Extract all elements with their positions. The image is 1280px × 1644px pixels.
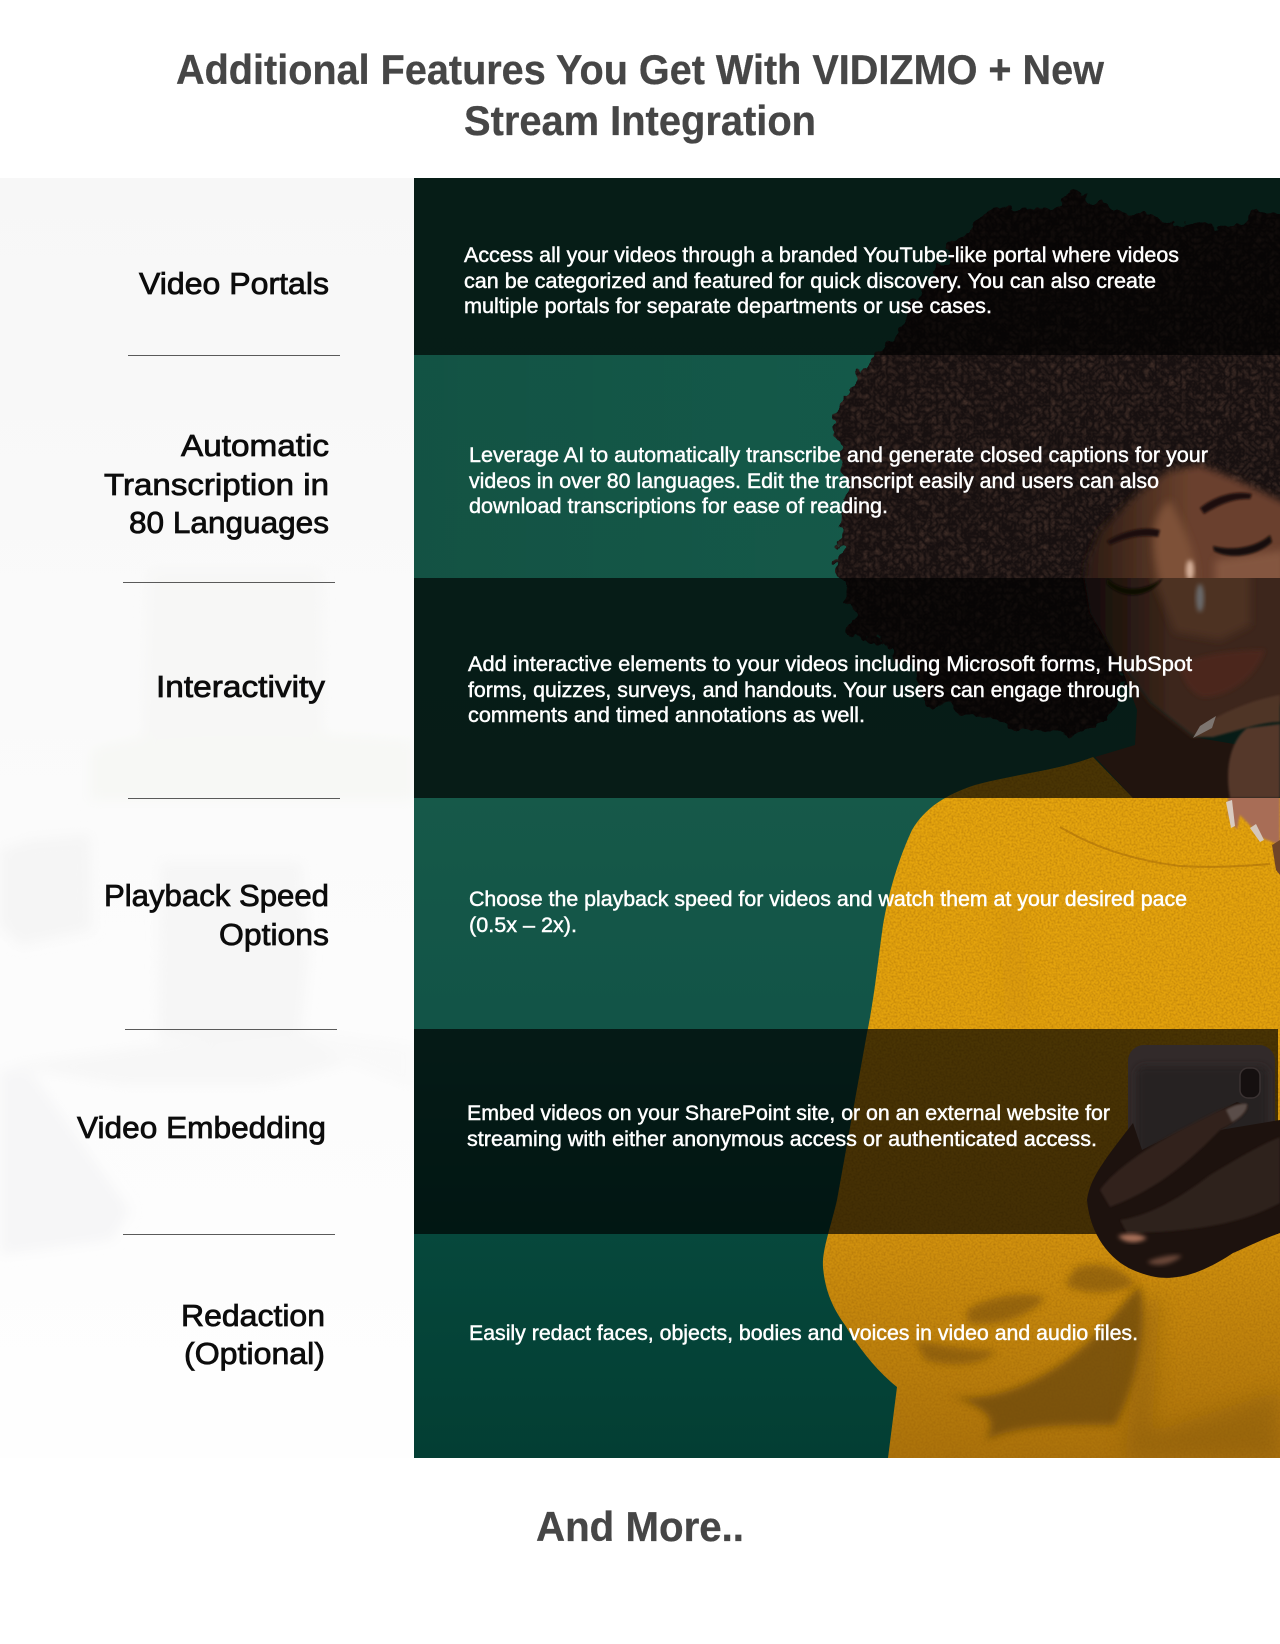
second finger	[1120, 1137, 1280, 1233]
description: Redaction: Easily redact faces, objects, bodies and voices in video and audio files.	[469, 1322, 1138, 1345]
face in light row	[1083, 465, 1280, 590]
label: Playback Speed Options	[104, 878, 329, 952]
label: Automatic Transcription in 80 Languages: 80 Languages	[129, 505, 329, 540]
phone camera	[1240, 1068, 1260, 1098]
label: Automatic Transcription in 80 Languages: Automatic	[181, 428, 329, 463]
panel: photo of woman with phone on green background	[414, 178, 1280, 1458]
fingernail	[1193, 716, 1216, 738]
hand holding phone	[1087, 1045, 1280, 1278]
first finger	[1100, 1104, 1248, 1207]
description: Video Portals	[464, 244, 1179, 318]
lips	[1180, 650, 1265, 697]
label: Interactivity: Interactivity	[156, 669, 326, 704]
label: Redaction (Optional)	[181, 1298, 325, 1371]
title	[176, 46, 1104, 144]
title: Stream Integration	[464, 97, 816, 144]
face, neck and hand in dark row	[1083, 570, 1280, 798]
description: Video Embedding: streaming with either anonymous access or authenticated access.	[467, 1128, 1097, 1151]
arm shading patches	[915, 1264, 1136, 1364]
description: Interactivity: Add interactive elements to your videos including Microsoft forms, HubSpot	[468, 653, 1192, 676]
dark overlay rows	[414, 178, 1280, 1234]
label: Automatic Transcription in 80 Languages	[104, 428, 329, 540]
description: Playback Speed Options: Choose the playback speed for videos and watch them at your desired pace	[469, 888, 1187, 911]
description: Video Portals: can be categorized and featured for quick discovery. You can also create	[464, 270, 1156, 293]
green backdrop	[414, 178, 1280, 1458]
description: Video Embedding: Embed videos on your SharePoint site, or on an external website for	[467, 1102, 1110, 1125]
arm underside shadow	[945, 1285, 1143, 1440]
description: Video Embedding	[467, 1102, 1110, 1151]
sweater patches	[1000, 900, 1180, 1040]
row 2: Automatic Transcription	[104, 428, 1208, 540]
description: Interactivity: comments and timed annotations as well.	[468, 704, 865, 727]
label: Redaction (Optional): (Optional)	[184, 1336, 325, 1371]
description: Interactivity	[468, 653, 1192, 727]
row 3: Interactivity	[156, 653, 1192, 727]
label: Video Embedding: Video Embedding	[77, 1110, 326, 1145]
row 1: Video Portals	[139, 244, 1179, 318]
description: Playback Speed Options	[469, 888, 1187, 937]
fingernail on phone	[1226, 1104, 1247, 1122]
fist	[1228, 724, 1280, 798]
label: Video Portals: Video Portals	[139, 266, 329, 301]
description: Automatic Transcription: Leverage AI to automatically transcribe and generate closed captions for your	[469, 444, 1208, 467]
fingers at collar	[1226, 790, 1280, 875]
label: Redaction (Optional): Redaction	[181, 1298, 325, 1333]
green row tint	[414, 355, 914, 578]
row 4: Playback Speed Options	[104, 878, 1187, 952]
description: Automatic Transcription: download transcriptions for ease of reading.	[469, 495, 888, 518]
row 5: Video Embedding	[77, 1102, 1110, 1151]
panel: faded office photo background	[3, 574, 411, 1246]
neck	[1095, 663, 1240, 798]
face	[1083, 570, 1280, 737]
hand	[1087, 1102, 1280, 1278]
finger at chin	[1193, 695, 1280, 737]
footer heading: And More..	[536, 1503, 744, 1550]
phone	[1128, 1045, 1275, 1140]
knuckle highlights	[1118, 1234, 1147, 1242]
label: Automatic Transcription in 80 Languages: Transcription in	[104, 467, 329, 502]
description: Automatic Transcription: videos in over 80 languages. Edit the transcript easily and users can also	[469, 470, 1159, 493]
label: Playback Speed Options: Playback Speed	[104, 878, 329, 913]
torso shading	[1125, 1300, 1280, 1458]
row 6: Redaction	[181, 1298, 1138, 1371]
description: Playback Speed Options: (0.5x – 2x).	[469, 914, 577, 937]
description: Automatic Transcription	[469, 444, 1208, 518]
title: Additional Features You Get With VIDIZMO + New	[176, 46, 1104, 93]
sweater	[823, 757, 1280, 1458]
description: Video Portals: multiple portals for separate departments or use cases.	[464, 295, 992, 318]
collar line	[1060, 827, 1270, 867]
description: Video Portals: Access all your videos through a branded YouTube-like portal where videos	[464, 244, 1179, 267]
hair	[833, 195, 1280, 735]
label: Playback Speed Options: Options	[219, 917, 329, 952]
description: Interactivity: forms, quizzes, surveys, and handouts. Your users can engage through	[468, 679, 1140, 702]
